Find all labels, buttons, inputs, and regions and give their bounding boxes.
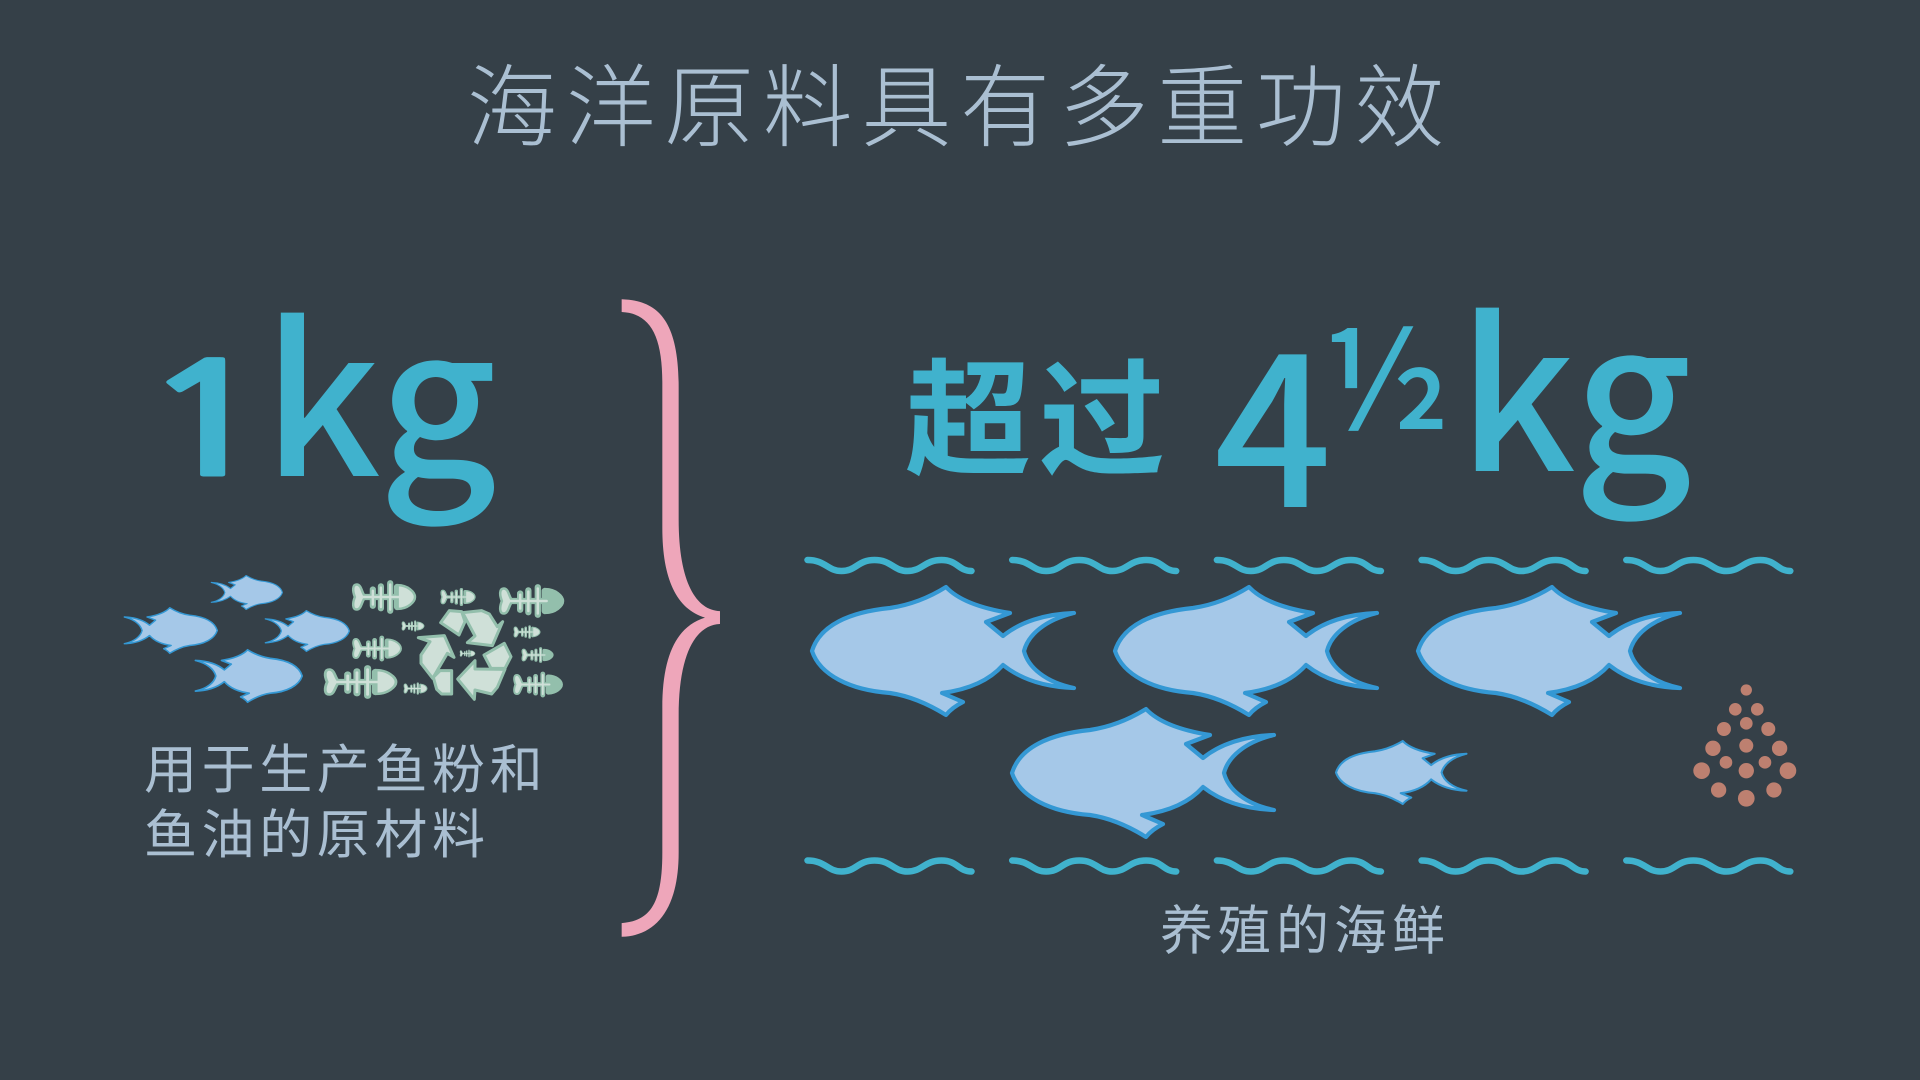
- left amount: 1kg: kg: [263, 239, 497, 536]
- right amount: more than 4 1/2 kg: kg: [1458, 234, 1692, 531]
- bottom waves: [808, 860, 1790, 872]
- right amount: more than 4 1/2 kg: 4: [1214, 267, 1332, 567]
- icon: recycling symbol: [418, 611, 511, 699]
- left caption: 鱼油的原材料: [144, 806, 490, 865]
- brace: [622, 299, 720, 937]
- icon: roe droplet: [1693, 684, 1796, 807]
- right amount: more than 4 1/2 kg: ½: [1323, 271, 1449, 469]
- title: 海洋原料具有多重功效: [467, 59, 1453, 159]
- right caption: 养殖的海鲜: [1160, 902, 1450, 961]
- left amount: 1kg: [136, 239, 497, 536]
- top waves: [808, 560, 1790, 571]
- right amount: more than 4 1/2 kg: [905, 234, 1692, 567]
- fish bones group: [325, 583, 563, 696]
- fish group: [124, 576, 349, 702]
- left icons: fish and recycled bones: [124, 576, 563, 702]
- farmed fish group: [812, 587, 1680, 837]
- right amount: more than 4 1/2 kg: 超过: [905, 320, 1173, 502]
- left caption: 用于生产鱼粉和: [144, 741, 547, 800]
- left amount: 1kg: 1: [136, 344, 279, 500]
